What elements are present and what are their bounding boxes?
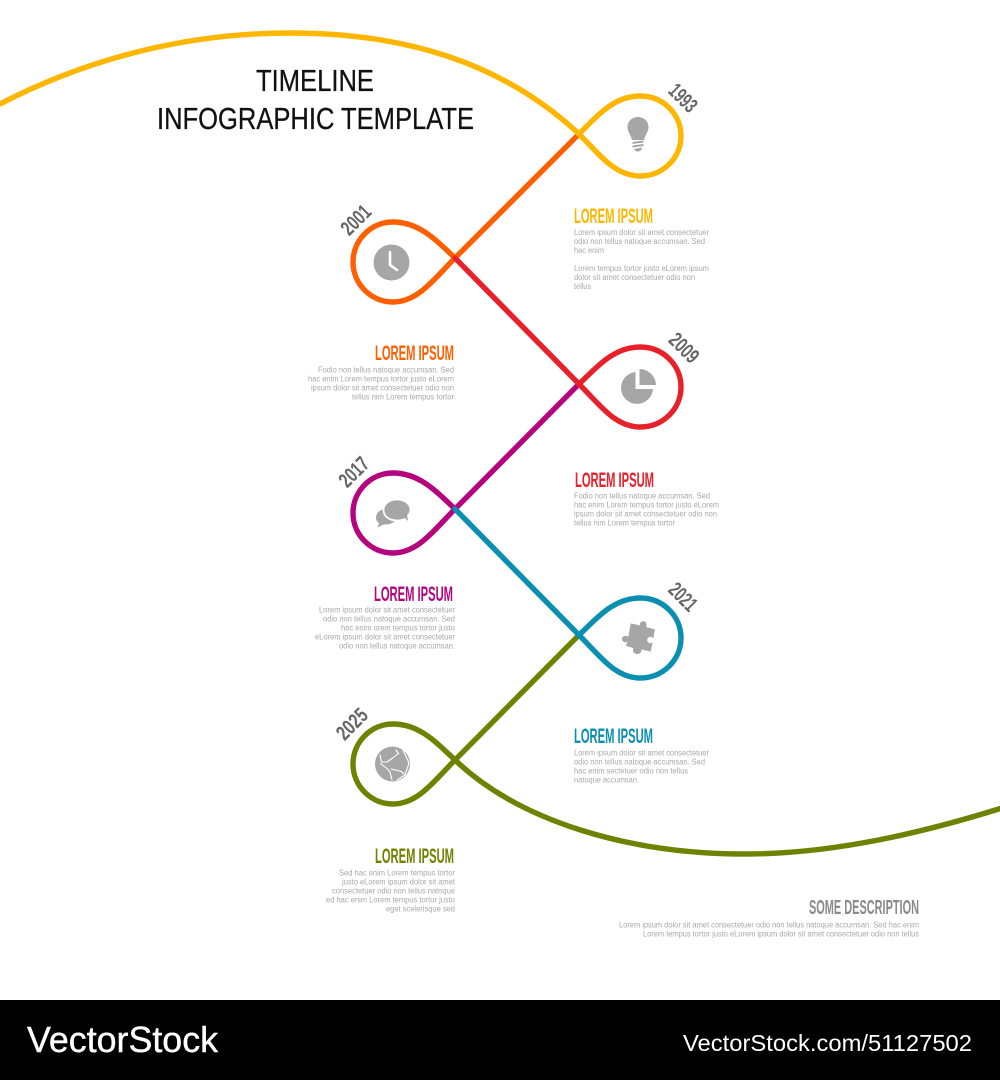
panel: 2001 text: [308, 342, 454, 402]
body 2017: hac enim orem tempus tortor justo: [341, 624, 456, 632]
icon: globe: [375, 746, 410, 782]
footer bar: [0, 1000, 1000, 1080]
panel: 2017 text: [315, 583, 456, 650]
body 2021: natoque accumsan.: [574, 776, 639, 784]
heading 2017: LOREM IPSUM: [374, 583, 453, 606]
panel: 1993 text: [574, 205, 709, 291]
body 1993: dolor sit amet consectetuer odio non: [574, 273, 695, 282]
body 2001: Fodio non tellus natoque accumsan. Sed: [318, 366, 454, 374]
year 2021: 2021: [664, 578, 702, 617]
year 2009: 2009: [664, 329, 703, 368]
body 2009: Fodio non tellus natoque accumsan. Sed: [574, 492, 710, 500]
year 2017: 2017: [335, 453, 374, 492]
body 2025: ed hac enim Lorem tempus tortor justo: [326, 896, 456, 904]
year 2025: 2025: [332, 704, 373, 745]
body 1993: hac enim: [574, 246, 604, 255]
body 2001: [308, 366, 454, 402]
heading 2009: LOREM IPSUM: [575, 469, 654, 492]
icon: clock: [374, 244, 410, 280]
heading 2025: LOREM IPSUM: [375, 845, 454, 868]
heading 2021: LOREM IPSUM: [574, 725, 653, 748]
description body: Lorem tempus tortor justo eLorem ipsum dolor sit amet consectetuer odio non tellus: [643, 930, 919, 938]
body 1993: tellus: [574, 282, 591, 291]
body 2025: [326, 868, 456, 914]
title: [157, 63, 474, 136]
panel: 2009 text: [574, 469, 719, 528]
connector: magenta segment and loop 2017: [353, 384, 579, 553]
footer url: VectorStock.com/51127502: [683, 1030, 972, 1056]
body 1993: [574, 228, 709, 291]
connector: red segment and loop 2009: [455, 258, 681, 427]
body 2009: hac enim Lorem tempus tortor justo eLorem: [574, 500, 719, 510]
icon: puzzle piece: [622, 621, 655, 654]
body 2009: ipsum dolor sit amet consectetuer odio non: [574, 510, 717, 518]
panel: some description: [619, 897, 919, 938]
icon: light bulb: [628, 117, 648, 152]
body 2021: [574, 748, 709, 784]
body 2017: [315, 606, 456, 650]
body 1993: Lorem ipsum dolor sit amet consectetuer: [574, 228, 709, 237]
heading 1993: LOREM IPSUM: [574, 205, 653, 228]
connector: yellow opening curve and loop 1993: [0, 33, 681, 176]
icon: pie chart: [621, 369, 656, 404]
body 2001: hac enim Lorem tempus tortor justo eLorem: [308, 374, 454, 384]
body 2017: Lorem ipsum dolor sit amet consectetuer: [319, 606, 455, 614]
body 2009: [574, 492, 719, 528]
panel: 2021 text: [574, 725, 709, 784]
body 2001: tellus nim Lorem tempus tortor: [352, 392, 454, 402]
body 2001: ipsum dolor sit amet consectetuer odio non: [311, 384, 454, 392]
footer logo: VectorStock: [27, 1019, 219, 1060]
body 2017: eLorem ipsum dolor sit amet consectetuer: [315, 632, 455, 642]
heading 2001: LOREM IPSUM: [375, 342, 454, 365]
year 1993: 1993: [664, 79, 702, 117]
body 2025: justo eLorem ipsum dolor sit amet: [341, 878, 456, 886]
body 2021: Lorem ipsum dolor sit amet consectetuer: [574, 748, 709, 758]
body 2021: odio non tellus natoque accumsan. Sed: [574, 758, 705, 766]
body 2025: eget scelerisque sed: [386, 904, 455, 914]
connector: orange segment and loop 2001: [353, 134, 579, 302]
description body: Lorem ipsum dolor sit amet consectetuer odio non tellus natoque accumsan. Sed hac enim: [619, 920, 919, 930]
title: INFOGRAPHIC TEMPLATE: [157, 101, 474, 136]
title: TIMELINE: [256, 63, 374, 98]
body 2025: Sed hac enim Lorem tempus tortor: [339, 868, 455, 878]
year 2001: 2001: [337, 200, 376, 240]
icon: speech bubbles: [376, 500, 410, 528]
body 2021: hac enim sectetuer odio non tellus: [574, 766, 688, 776]
body 2017: odio non tellus natoque accumsan.: [339, 642, 455, 650]
year labels: [332, 79, 703, 745]
body 2009: tellus nim Lorem tempus tortor: [574, 518, 675, 528]
panel: 2025 text: [326, 845, 456, 914]
description body: [619, 920, 919, 938]
body 1993: Lorem tempus tortor justo eLorem ipsum: [574, 264, 709, 273]
body 2017: odio non tellus natoque accumsan. Sed: [323, 614, 455, 624]
connector: olive loop 2025 and closing curve: [353, 635, 1000, 854]
body 1993: odio non tellus natoque accumsan. Sed: [574, 237, 705, 246]
body 2025: consectetuer odio non tellus natoque: [332, 886, 456, 896]
connector: teal segment and loop 2021: [455, 509, 681, 678]
